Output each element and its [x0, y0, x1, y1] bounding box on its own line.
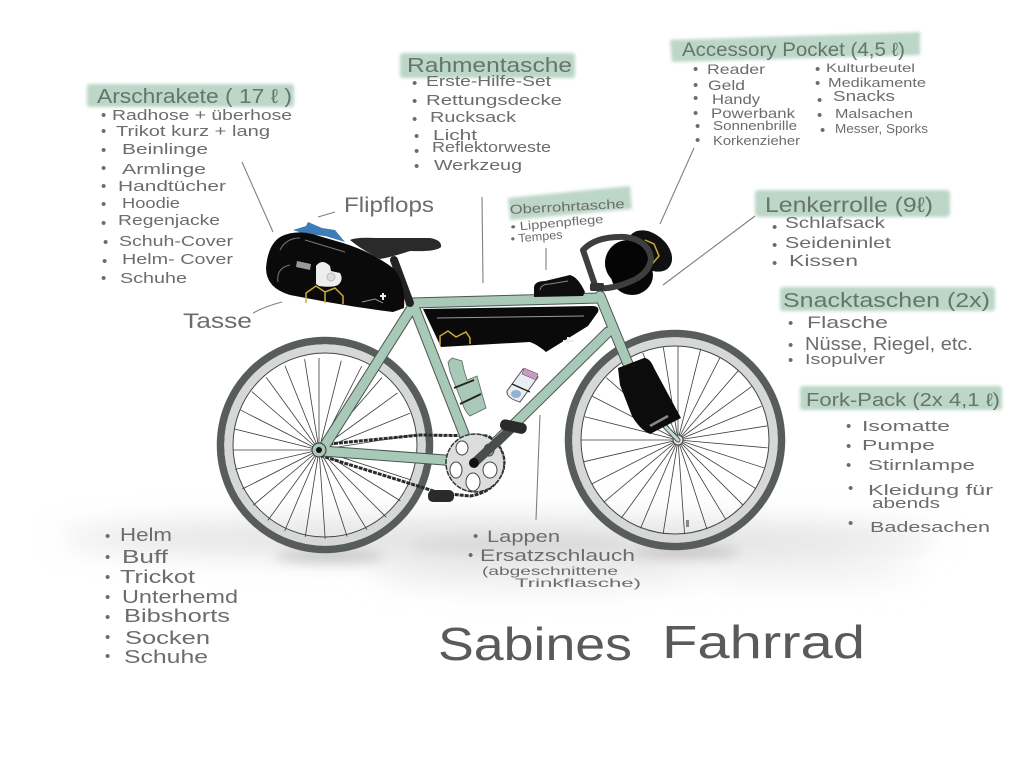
list: worn clothing: Buff	[122, 547, 169, 567]
title: Sabines	[438, 618, 632, 670]
list: Rahmentasche items: •	[412, 75, 417, 92]
label: Lenkerrolle	[755, 190, 950, 272]
list: Fork-Pack items: Kleidung für	[868, 482, 993, 499]
title: Fahrrad	[662, 616, 865, 668]
list: Accessory Pocket right column: Messer, Sporks	[835, 121, 929, 136]
list: Arschrakete items: •	[101, 196, 106, 213]
label: Lappen and Ersatzschlauch: •	[468, 547, 473, 564]
list: Oberrohrtasche items	[510, 212, 604, 246]
list: Rahmentasche items: Erste-Hilfe-Set	[426, 73, 552, 90]
heading: Oberrohrtasche: Oberrohrtasche	[509, 196, 625, 217]
list: Accessory Pocket right column: •	[820, 122, 825, 139]
list: worn clothing: Trickot	[120, 567, 195, 587]
list: Arschrakete items: Radhose + überhose	[112, 107, 292, 124]
list: Accessory Pocket left column: Geld	[708, 77, 745, 93]
heading: Fork-Pack: Fork-Pack (2x 4,1 ℓ)	[806, 390, 1000, 410]
list: Rahmentasche items: Rettungsdecke	[426, 92, 562, 109]
fork pack	[618, 358, 681, 434]
list: Accessory Pocket left column: •	[693, 77, 698, 94]
list: Rahmentasche items: •	[412, 111, 417, 128]
list: worn clothing: Schuhe	[124, 647, 208, 667]
saddle	[350, 238, 441, 259]
list: Fork-Pack items: Isomatte	[862, 418, 950, 435]
list: Arschrakete items: Helm- Cover	[122, 251, 233, 268]
list: Arschrakete items: •	[101, 142, 106, 159]
chain	[319, 435, 504, 496]
list: Snacktaschen items: •	[788, 337, 793, 354]
list: worn clothing	[105, 525, 238, 667]
list: Arschrakete items: Regenjacke	[118, 212, 220, 229]
rear wheel	[220, 340, 430, 550]
heading highlight: Rahmentasche	[400, 53, 575, 78]
list: worn clothing: Unterhemd	[122, 587, 238, 607]
jar	[507, 368, 538, 402]
list: worn clothing: •	[105, 569, 110, 586]
list: Oberrohrtasche items: • Tempes	[510, 228, 563, 246]
list: Accessory Pocket left column: Powerbank	[711, 105, 796, 121]
list: Accessory Pocket left column: •	[695, 132, 700, 149]
list: Arschrakete items: Beinlinge	[122, 141, 208, 158]
label: Flipflops: Flipflops	[344, 194, 434, 217]
list: Arschrakete items: Schuhe	[120, 270, 187, 287]
list: Accessory Pocket left column: Handy	[712, 91, 760, 107]
label: Lappen and Ersatzschlauch: Trinkflasche)	[515, 576, 641, 590]
list: worn clothing: •	[105, 549, 110, 566]
frame bag	[423, 306, 598, 352]
heading highlight: Fork-Pack	[800, 386, 1002, 410]
list: Arschrakete items: •	[101, 160, 106, 177]
list: Arschrakete items: Trikot kurz + lang	[116, 123, 270, 140]
ground shadow	[60, 518, 940, 588]
list: Lenkerrolle items	[772, 215, 892, 272]
handlebar roll	[583, 222, 680, 295]
list: Arschrakete items: •	[101, 215, 106, 232]
list: Accessory Pocket right column: Kulturbeutel	[826, 61, 915, 75]
chainring	[446, 434, 504, 492]
list: Fork-Pack items: •	[848, 515, 853, 532]
list: Lenkerrolle items: •	[772, 255, 777, 272]
heading highlight: Lenkerrolle	[755, 190, 950, 217]
icon: flipflops	[293, 222, 345, 242]
title	[438, 616, 865, 670]
list: Snacktaschen items: Isopulver	[805, 351, 885, 368]
list: Arschrakete items: Handtücher	[118, 178, 226, 195]
bottle	[448, 358, 486, 416]
list: Accessory Pocket right column: •	[815, 61, 820, 78]
list: Fork-Pack items: •	[846, 418, 851, 435]
list: Snacktaschen items	[788, 313, 973, 369]
heading highlight: Arschrakete	[87, 84, 294, 107]
list: Lenkerrolle items: Kissen	[789, 253, 858, 270]
heading: Rahmentasche: Rahmentasche	[407, 55, 572, 77]
list: worn clothing: •	[105, 648, 110, 665]
list: Fork-Pack items: •	[846, 438, 851, 455]
list: worn clothing: •	[105, 528, 110, 545]
list: worn clothing: •	[105, 609, 110, 626]
list: Fork-Pack items: abends	[872, 495, 940, 512]
list: Snacktaschen items: •	[788, 315, 793, 332]
list: Lenkerrolle items: •	[772, 219, 777, 236]
list: worn clothing: Bibshorts	[124, 606, 230, 626]
list: Accessory Pocket right column	[815, 61, 929, 139]
list: Rahmentasche items	[412, 73, 562, 175]
list: Arschrakete items: •	[101, 178, 106, 195]
list: Accessory Pocket left column: Reader	[707, 61, 765, 77]
label: Accessory Pocket	[670, 32, 929, 149]
list: Snacktaschen items: •	[788, 352, 793, 369]
heading: Arschrakete: Arschrakete ( 17 ℓ )	[97, 86, 292, 108]
list: worn clothing: •	[105, 629, 110, 646]
list: Arschrakete items: •	[102, 253, 107, 270]
list: Lenkerrolle items: •	[772, 237, 777, 254]
list: Arschrakete items	[101, 107, 292, 287]
saddle bag	[266, 232, 404, 312]
list: Lenkerrolle items: Schlafsack	[785, 215, 886, 232]
list: Rahmentasche items: •	[414, 158, 419, 175]
label: Lappen and Ersatzschlauch	[468, 527, 641, 590]
list: Snacktaschen items: Nüsse, Riegel, etc.	[805, 334, 973, 354]
list: Accessory Pocket right column: Snacks	[833, 88, 895, 105]
list: Rahmentasche items: Reflektorweste	[432, 139, 551, 156]
list: Arschrakete items: Armlinge	[122, 161, 206, 178]
label: Lappen and Ersatzschlauch: (abgeschnittene	[482, 564, 619, 578]
list: Arschrakete items: •	[101, 123, 106, 140]
list: Arschrakete items: •	[103, 234, 108, 251]
heading: Lenkerrolle: Lenkerrolle (9ℓ)	[765, 194, 933, 217]
label: Snacktaschen	[780, 287, 995, 369]
list: Fork-Pack items: •	[846, 457, 851, 474]
frame	[322, 260, 678, 462]
label: Fork-Pack	[800, 386, 1002, 536]
heading highlight: Snacktaschen	[780, 287, 995, 311]
list: Rahmentasche items: •	[414, 128, 419, 145]
list: Fork-Pack items	[846, 418, 993, 536]
top tube bag	[534, 275, 585, 297]
heading highlight: Oberrohrtasche	[508, 186, 632, 220]
list: Accessory Pocket left column: •	[693, 105, 698, 122]
list: Accessory Pocket left column: •	[693, 90, 698, 107]
list: Oberrohrtasche items: • Lippenpflege	[510, 212, 604, 234]
list: Lenkerrolle items: Seideninlet	[785, 235, 892, 252]
label: Rahmentasche	[400, 53, 575, 175]
list: Accessory Pocket right column: Malsachen	[835, 106, 913, 121]
heading: Snacktaschen: Snacktaschen (2x)	[783, 290, 990, 312]
list: Accessory Pocket left column: •	[695, 118, 700, 135]
list: Fork-Pack items: Pumpe	[862, 437, 935, 454]
list: worn clothing: Socken	[125, 628, 210, 648]
list: Rahmentasche items: Werkzeug	[434, 157, 522, 174]
list: Rahmentasche items: •	[412, 93, 417, 110]
list: Accessory Pocket right column: Medikamente	[828, 75, 926, 90]
list: Rahmentasche items: Licht	[433, 127, 478, 144]
list: Fork-Pack items: Stirnlampe	[868, 457, 975, 474]
list: Accessory Pocket left column: Sonnenbrille	[713, 118, 797, 133]
label: Lappen and Ersatzschlauch: Lappen	[487, 527, 560, 546]
heading highlight: Accessory Pocket	[670, 32, 920, 62]
label: Arschrakete	[87, 84, 294, 287]
icon: mug	[316, 262, 342, 287]
list: Arschrakete items: Hoodie	[122, 195, 180, 212]
label: Tasse: Tasse	[183, 310, 252, 333]
list: Arschrakete items: •	[101, 107, 106, 124]
list: Rahmentasche items: Rucksack	[430, 109, 517, 126]
list: Fork-Pack items: •	[848, 480, 853, 497]
label: Oberrohrtasche	[508, 186, 632, 246]
label: Lappen and Ersatzschlauch: Ersatzschlauch	[480, 546, 635, 565]
list: worn clothing: •	[105, 589, 110, 606]
label: Lappen and Ersatzschlauch: •	[473, 528, 478, 545]
list: Arschrakete items: Schuh-Cover	[119, 233, 233, 250]
front wheel	[568, 334, 782, 546]
heading: Accessory Pocket: Accessory Pocket (4,5 ℓ)	[682, 40, 905, 61]
crank and pedals	[428, 418, 528, 502]
list: Arschrakete items: •	[101, 270, 106, 287]
list: Accessory Pocket left column: Korkenzieher	[713, 133, 801, 148]
list: Accessory Pocket right column: •	[815, 75, 820, 92]
list: Accessory Pocket right column: •	[817, 107, 822, 124]
bicycle illustration	[220, 222, 782, 550]
list: worn clothing: Helm	[120, 525, 172, 545]
list: Fork-Pack items: Badesachen	[870, 519, 990, 536]
list: Accessory Pocket right column: •	[817, 92, 822, 109]
list: Snacktaschen items: Flasche	[807, 313, 888, 332]
list: Accessory Pocket left column: •	[693, 61, 698, 78]
leader lines	[242, 148, 755, 520]
list: Accessory Pocket left column	[693, 61, 801, 149]
list: Rahmentasche items: •	[414, 143, 419, 160]
